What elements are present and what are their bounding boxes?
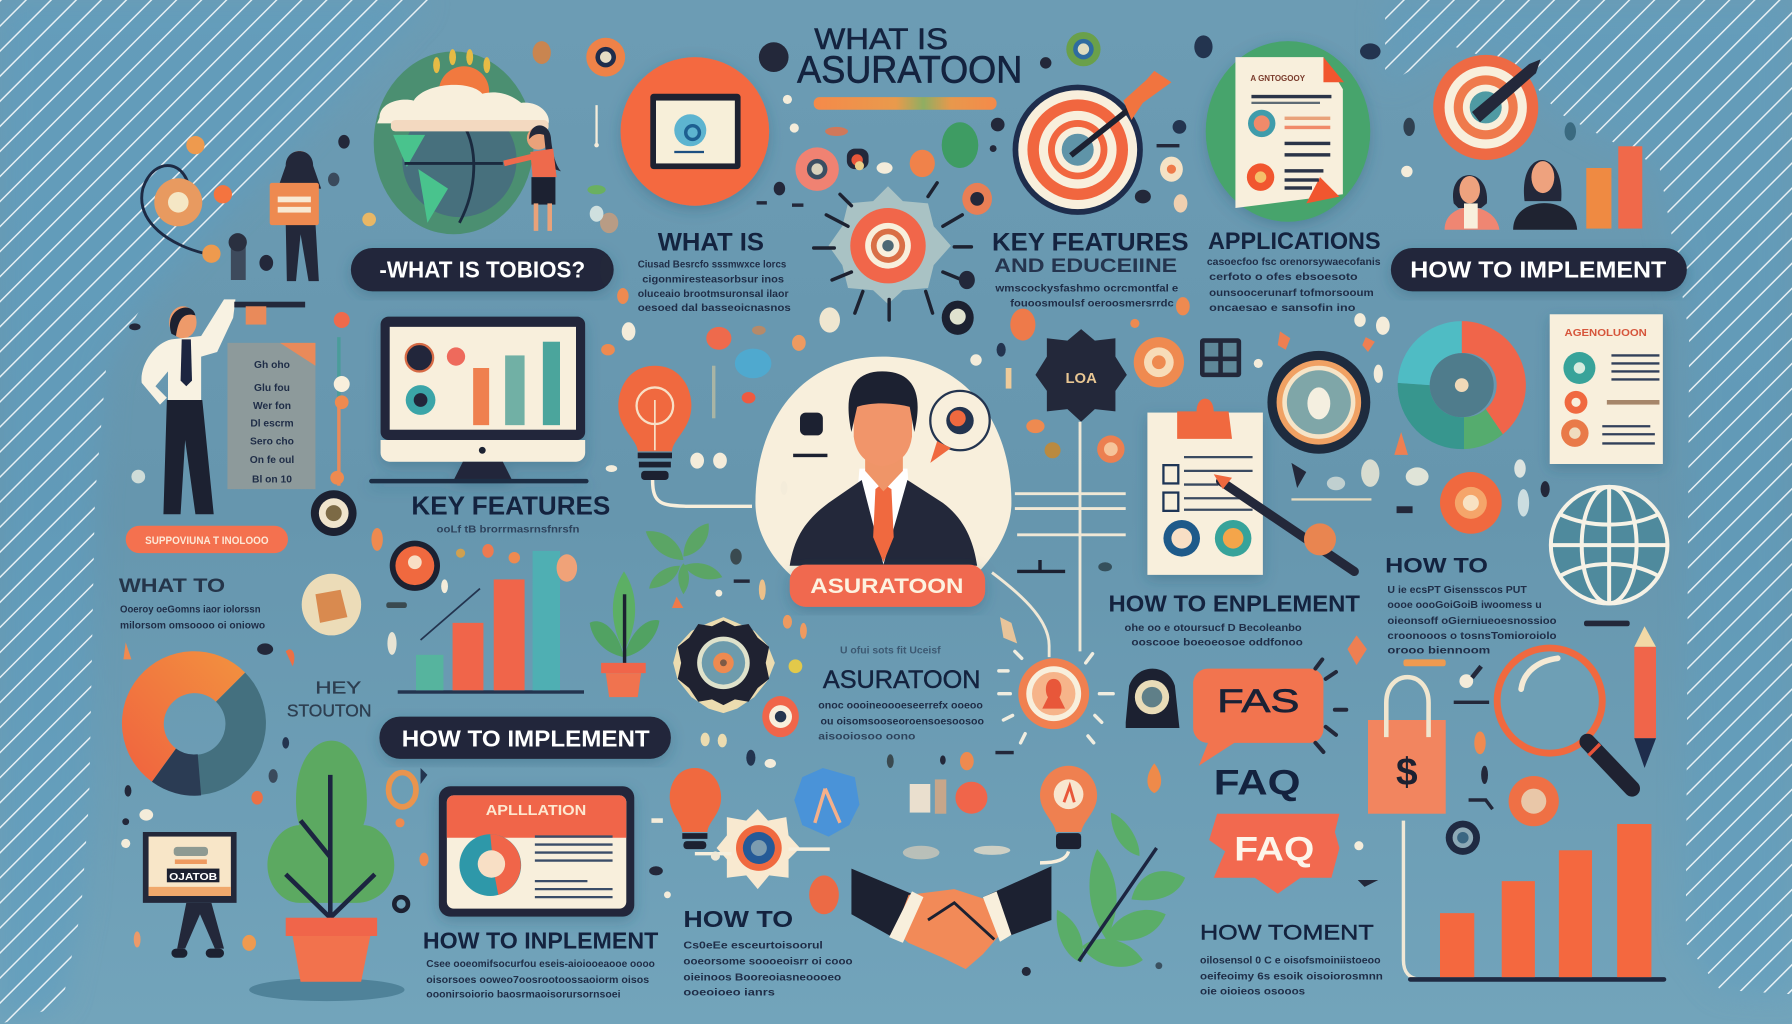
central businessman <box>755 357 1011 583</box>
icon: dark orange badge <box>390 541 440 591</box>
pill: asuratoon <box>790 565 985 607</box>
icon: pencil <box>1634 626 1656 768</box>
bar chart with trend <box>398 551 584 694</box>
text block: asuratoon: aisooiosoo oono <box>818 731 916 742</box>
text block: what is: oesoed dal basseoicnasnos <box>638 303 791 314</box>
icon: potted plant <box>590 571 659 697</box>
text block: how to (right): oieonsoff oGierniueoesnossioo <box>1387 616 1557 627</box>
icon: orange at badge <box>1509 776 1559 826</box>
icon: green leaves <box>646 523 722 594</box>
label: hey stouton: STOUTON <box>287 701 371 721</box>
text block: how to inplement: oisorsoes ooweo7oosrootoossaoiorm oisos <box>426 975 649 986</box>
donut chart <box>122 651 266 796</box>
icon: cream starburst target <box>695 809 830 889</box>
icon: orange badge <box>1440 472 1502 534</box>
icon: shopping bag: $ <box>1396 751 1418 794</box>
pointing man with panel: Glu fou <box>254 383 290 394</box>
two women and orange bars <box>1445 146 1642 230</box>
icon: small ring <box>1446 821 1480 855</box>
scattered small icons <box>121 32 1630 976</box>
icon: magnifying glass <box>1497 648 1632 789</box>
bar chart: bottom right <box>1403 821 1666 982</box>
text block: how to inplement: HOW TO INPLEMENT <box>423 928 658 954</box>
pill: how to implement (top right) <box>1391 248 1687 291</box>
icon: shopping bag <box>1368 677 1446 814</box>
text block: how to ment: oie oioieos osooos <box>1200 986 1305 997</box>
icon: gear <box>673 617 775 713</box>
person holding orange sign <box>229 151 321 281</box>
document with heading and list <box>1550 314 1663 464</box>
pill: orange label <box>126 526 288 553</box>
pointing man with panel: Dl escrm <box>250 418 294 429</box>
text block: applications: casoecfoo fsc orenorsywaecofanis <box>1207 257 1381 268</box>
pointing man with panel <box>141 299 315 514</box>
speech bubble: FAS <box>1193 669 1323 766</box>
pointing man with panel: Bl on 10 <box>252 474 292 485</box>
text block: how to (right): croonooos o tosnsTomioroiolo <box>1387 631 1557 642</box>
text block: how to ment: HOW TOMENT <box>1200 919 1374 944</box>
text block: what to: Ooeroy oeGomns iaor iolorssn <box>120 605 261 616</box>
text block: asuratoon: U ofui sots fit Uceisf <box>840 646 941 657</box>
text block: key features: KEY FEATURES <box>411 490 610 520</box>
handshake <box>851 866 1051 969</box>
icon: tree in pot <box>249 741 405 1001</box>
text block: what is: oluceaio brootmsuronsal ilaor <box>638 289 789 300</box>
person behind billboard <box>143 832 237 958</box>
text block: how to (bottom center): ooeoioeo ianrs <box>683 987 775 998</box>
icon: cream medallion <box>302 574 361 635</box>
pill: what is topics <box>351 248 614 291</box>
icon: ring lens <box>1267 351 1370 454</box>
text block: how to inplement <box>423 928 658 1001</box>
text block: key features and education <box>992 228 1189 309</box>
icon: dark at-sign badge <box>1126 669 1179 728</box>
text block: applications: APPLICATIONS <box>1208 228 1381 255</box>
text block: how to (bottom center): HOW TO <box>683 906 793 932</box>
text block: how to ment: oilosensol 0 C e oisofsmoiniistoeoo <box>1200 955 1381 966</box>
text block: key features: ooLf tB brorrmasrnsfnrsfn <box>437 525 580 536</box>
globe with cloud and woman <box>374 49 561 234</box>
icon: orbit ring with orange core <box>142 136 232 263</box>
icon: orange swirl circle <box>1134 337 1184 387</box>
text block: applications: ounsoocerunarf tofmorsooum <box>1209 288 1374 299</box>
pill: what is topics: -WHAT IS TOBIOS? <box>379 257 585 283</box>
icon: dark starburst badge with line: LOA <box>1065 371 1097 387</box>
icon: gear target with rays <box>814 183 971 320</box>
application card <box>439 786 634 917</box>
icon: document on green circle <box>1206 41 1370 222</box>
text block: how to implement (center right): ooscooe boeoeosoe oddfonoo <box>1131 638 1303 649</box>
text block: key features and education: KEY FEATURES <box>992 228 1189 256</box>
icon: grid window <box>1200 338 1241 377</box>
text block: how to (bottom center): Cs0eEe esceurtoisoorul <box>683 941 823 952</box>
document with heading and list: AGENOLUOON <box>1565 328 1647 339</box>
pointing man with panel: Gh oho <box>254 360 290 371</box>
icon: document on green circle: A GNTOGOOY <box>1250 74 1306 83</box>
icon: bulb lower right <box>1040 766 1097 863</box>
text block: applications: cerfoto o ofes ebsoesoto <box>1209 272 1358 283</box>
icon: target with pen <box>1433 55 1541 160</box>
text block: how to (right): orooo biennoom <box>1387 646 1491 657</box>
pie chart <box>1398 321 1526 449</box>
icon: small target badge <box>762 696 799 737</box>
timeline with dots <box>330 312 350 486</box>
icon: dark starburst badge with line <box>992 329 1127 657</box>
right stripe pattern <box>1385 0 1792 994</box>
text block: key features and education: wmscockysfashmo ocrcmontfal e <box>994 283 1179 294</box>
text block: key features and education: fouoosmoulsf oeroosmersrrdc <box>1010 298 1174 309</box>
text block: asuratoon: ou oisomsooseoroensoesoosoo <box>821 717 984 728</box>
icon: orange circle with monitor <box>621 57 769 206</box>
text block: what to <box>119 575 265 632</box>
text block: how to implement (center right) <box>1109 590 1360 649</box>
text block: how to ment: oeifeoimy 6s esoik oisoiorosmnn <box>1200 971 1383 982</box>
pointing man with panel: Sero cho <box>250 437 294 448</box>
pointing man with panel: On fe oul <box>250 455 294 466</box>
title: WHAT IS <box>814 23 948 56</box>
text block: how to (right): HOW TO <box>1385 553 1488 578</box>
text block: applications <box>1207 228 1381 314</box>
pill: orange label: SUPPOVIUNA T INOLOOO <box>145 535 269 547</box>
text block: how to (right) <box>1385 553 1557 657</box>
label: hey stouton <box>287 678 371 721</box>
wireframe globe <box>1551 487 1667 603</box>
speech bubble: FAQ <box>1209 814 1339 894</box>
pill: how to implement (top right): HOW TO IMPLEMENT <box>1410 257 1666 283</box>
text block: how to (bottom center): ooeorsome soooeoisrr oi cooo <box>683 957 853 968</box>
icon: target with arrow <box>1013 71 1171 215</box>
heading: FAQ: FAQ <box>1214 762 1301 802</box>
text block: asuratoon: onoc oooineoooeseerrefx ooeoo <box>818 701 983 712</box>
text block: what to: WHAT TO <box>119 575 225 597</box>
text block: key features <box>411 490 610 536</box>
icon: orange keyhole badge with rays <box>999 651 1113 743</box>
text block: how to (right): oooe oooGoiGoiB iwoomess u <box>1387 600 1542 611</box>
text block: what is: WHAT IS <box>658 228 764 256</box>
title: ASURATOON <box>797 48 1022 90</box>
pill: asuratoon: ASURATOON <box>810 573 963 598</box>
label: hey stouton: HEY <box>315 678 362 698</box>
text block: how to inplement: Csee ooeomifsocurfou eseis-aioiooeaooe oooo <box>426 959 655 970</box>
text block: what is <box>638 228 791 314</box>
text block: how to (right): U ie ecsPT Gisensscos PUT <box>1387 585 1527 596</box>
text block: applications: oncaesao e sansofin ino <box>1209 303 1356 314</box>
text block: how to (bottom center): oieinoos Booreoiasneoooeo <box>683 973 841 984</box>
title <box>797 23 1022 110</box>
clipboard with pen <box>1147 399 1354 575</box>
pointing man with panel: Wer fon <box>253 401 291 412</box>
text block: how to (bottom center) <box>683 906 853 998</box>
text block: key features and education: AND EDUCEIINE <box>994 255 1177 277</box>
text block: what to: milorsom omsoooo oi oniowo <box>120 621 265 632</box>
person behind billboard: OJATOB <box>169 872 217 883</box>
icon: bulb lower left <box>670 768 721 849</box>
green leaves with stem <box>1057 813 1185 967</box>
icon: small target <box>311 490 357 536</box>
text block: how to ment <box>1200 919 1383 997</box>
pill: how to implement (center): HOW TO IMPLEMENT <box>402 725 650 751</box>
pill: how to implement (center) <box>379 717 671 759</box>
text block: how to inplement: ooonirsoiorio baosrmaoisorursornsoei <box>426 990 621 1001</box>
text block: what is: Ciusad Besrcfo sssmwxce lorcs <box>638 259 786 270</box>
speech bubble: FAQ: FAQ <box>1234 831 1314 869</box>
text block: how to implement (center right): HOW TO ENPLEMENT <box>1109 590 1360 616</box>
speech bubble: FAS: FAS <box>1217 683 1299 719</box>
left stripe pattern <box>0 0 429 1024</box>
text block: asuratoon: ASURATOON <box>823 666 981 694</box>
icon: blue star badge <box>794 768 859 837</box>
icon: lightbulb with line <box>618 366 752 506</box>
text block: what is: cigonmiresteasorbsur inos <box>642 274 784 285</box>
text block: asuratoon <box>818 646 984 742</box>
text block: how to implement (center right): ohe oo e otoursucf D Becoleanbo <box>1125 623 1302 634</box>
application card: APLLLATION <box>486 803 586 819</box>
monitor with chart <box>369 317 589 483</box>
icon: small mid glyphs <box>903 779 1010 859</box>
